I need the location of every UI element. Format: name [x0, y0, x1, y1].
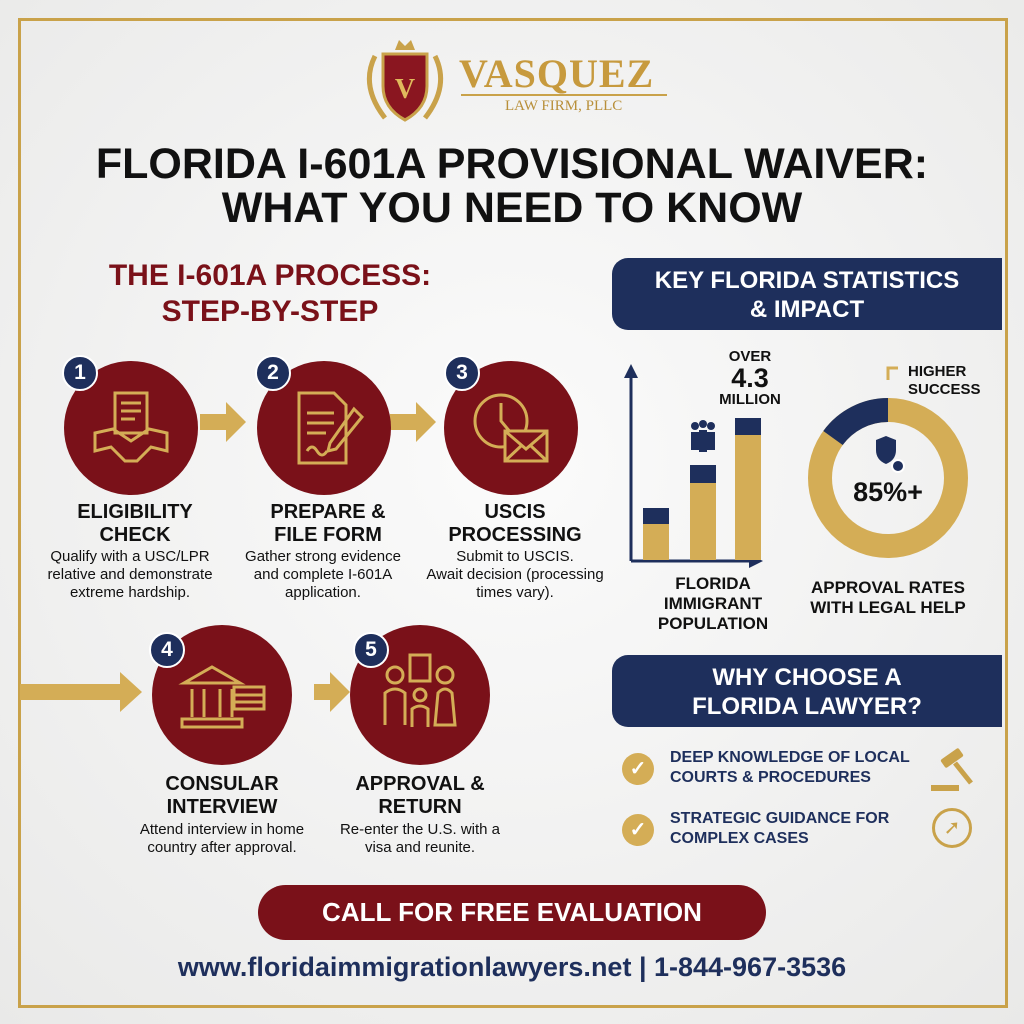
CTA button [258, 885, 766, 940]
step 1: ELIGIBILITY [77, 501, 193, 523]
step 3: Await decision (processing times vary). [426, 566, 604, 601]
donut chart [808, 363, 981, 617]
logo [366, 40, 667, 122]
step 3: Submit to USCIS. [456, 548, 574, 565]
bar chart: OVER [729, 348, 771, 365]
banner: statistics: KEY FLORIDA STATISTICS [655, 267, 959, 294]
donut chart: 85%+ [853, 477, 923, 507]
heading: process: STEP-BY-STEP [162, 295, 378, 328]
footer contact: www.floridaimmigrationlawyers.net | 1-844-967-3536 [178, 952, 846, 982]
banner: statistics [612, 258, 1002, 330]
bar chart: FLORIDA [675, 574, 751, 593]
donut chart: SUCCESS [908, 381, 981, 398]
step 3: 3 [456, 361, 468, 384]
heading: process: THE I-601A PROCESS: [109, 259, 431, 292]
benefit 2: STRATEGIC GUIDANCE FOR [670, 810, 889, 827]
benefit 2: ✓ [630, 819, 646, 841]
banner: why choose: FLORIDA LAWYER? [692, 693, 922, 720]
banner: statistics: & IMPACT [750, 296, 864, 323]
step 2: 2 [267, 361, 279, 384]
bar chart: 4.3 [731, 363, 769, 393]
benefit 1 [622, 748, 973, 791]
banner: why choose [612, 655, 1002, 727]
step 1 [47, 355, 213, 601]
step 4: 4 [161, 638, 173, 661]
step 4 [140, 625, 304, 856]
step 3: USCIS [484, 501, 546, 523]
logo: VASQUEZ [459, 51, 654, 96]
step 4: INTERVIEW [167, 796, 277, 818]
donut chart: WITH LEGAL HELP [810, 598, 966, 617]
benefit 1: COURTS & PROCEDURES [670, 769, 871, 786]
benefit 1: ✓ [630, 758, 646, 780]
donut chart: APPROVAL RATES [811, 578, 965, 597]
title [96, 140, 928, 232]
arrows row 1 [200, 402, 436, 442]
heading: process [109, 259, 431, 328]
step 2: PREPARE & [270, 501, 386, 523]
bar chart [624, 348, 781, 633]
bar chart: POPULATION [658, 614, 768, 633]
benefit 1: DEEP KNOWLEDGE OF LOCAL [670, 749, 910, 766]
step 5: APPROVAL & [355, 773, 485, 795]
logo: V [395, 74, 415, 105]
step 5: Re-enter the U.S. with a visa and reunite. [340, 821, 500, 856]
CTA button: CALL FOR FREE EVALUATION [322, 897, 702, 927]
logo: LAW FIRM, PLLC [505, 98, 622, 114]
step 4: CONSULAR [165, 773, 279, 795]
step 1: CHECK [99, 524, 171, 546]
benefit 2: COMPLEX CASES [670, 830, 809, 847]
benefit 2 [622, 808, 972, 848]
step 1: Qualify with a USC/LPR relative and demonstrate extreme hardship. [47, 548, 213, 601]
bar chart: IMMIGRANT [664, 594, 762, 613]
step 2: FILE FORM [274, 524, 382, 546]
title: WHAT YOU NEED TO KNOW [222, 184, 802, 232]
step 5: RETURN [378, 796, 462, 818]
donut chart: HIGHER [908, 363, 966, 380]
step 5 [340, 625, 500, 856]
benefit 2: ➚ [944, 817, 960, 839]
step 5: 5 [365, 638, 377, 661]
title: FLORIDA I-601A PROVISIONAL WAIVER: [96, 140, 928, 188]
step 3 [426, 357, 604, 601]
step 2 [245, 355, 401, 601]
banner: why choose: WHY CHOOSE A [712, 664, 902, 691]
step 3: PROCESSING [448, 524, 582, 546]
arrow row 2 [20, 672, 350, 712]
step 4: Attend interview in home country after approval. [140, 821, 304, 856]
step 1: 1 [74, 361, 86, 384]
bar chart: MILLION [719, 391, 781, 408]
step 2: Gather strong evidence and complete I-601A application. [245, 548, 401, 601]
